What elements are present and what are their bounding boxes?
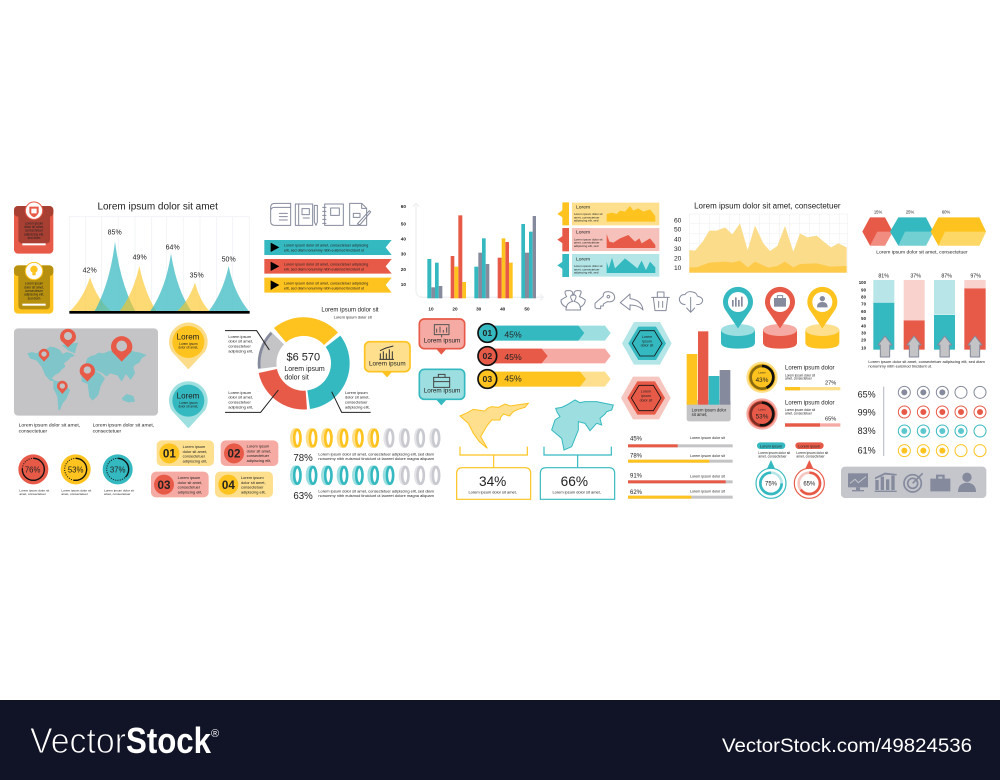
footer bar: Vector	[30, 720, 126, 761]
card: step 02: consectetuer	[247, 453, 270, 458]
marker: yellow teardrop: Lorem	[177, 333, 200, 342]
donut chart: Lorem ipsum	[284, 366, 325, 373]
chart: dot ratings: 61%	[858, 445, 876, 455]
card: step 04: consectetuer	[241, 485, 264, 490]
gauge: red 65 percent pointer	[794, 442, 828, 498]
bar chart: grouped columns	[401, 203, 543, 311]
bar chart: grouped columns: 30	[401, 252, 406, 257]
banner: teal ribbon: elit, sed diam nonummy nibh euismod tincidunt ut	[284, 248, 364, 252]
gauge: 53 percent: 53%	[68, 465, 84, 474]
banner: red ribbon: Lorem ipsum dolor sit amet, consectetuer adipiscing	[284, 262, 368, 266]
panel: yellow note card: Lorem ipsum	[25, 282, 43, 286]
area chart	[674, 214, 848, 273]
stacked bar chart with arrows: 81%	[878, 273, 889, 279]
marker: yellow teardrop	[169, 323, 208, 369]
progress bar: 01 teal	[478, 324, 611, 342]
chart: hexagonal prism proportions	[862, 209, 986, 246]
icon: reply arrow	[620, 294, 643, 310]
text block: donut note bottom right: Lorem ipsum	[345, 390, 368, 395]
hexagon: red	[621, 377, 671, 419]
gauge: 53 percent with bar	[746, 398, 840, 430]
progress bar: 78 percent: Lorem ipsum dolor sit	[690, 454, 725, 458]
text block: donut note bottom left	[228, 390, 253, 409]
stacked bar chart with arrows: 20	[861, 338, 867, 343]
panel: yellow mini area strip	[557, 202, 659, 225]
gauge: teal 75 percent pointer	[756, 442, 790, 498]
stacked bar chart with arrows: 10	[861, 345, 867, 350]
stacked bar chart with arrows: 90	[861, 287, 867, 292]
card: step 01: consectetuer	[183, 454, 206, 459]
footer bar: ®	[211, 728, 219, 740]
text block: 63 percent: 63%	[293, 491, 313, 502]
gauge: 53 percent with bar: Lorem ipsum dolor	[785, 400, 835, 406]
card: step 01: Lorem ipsum	[183, 444, 206, 449]
stacked bar chart with arrows: 50	[861, 316, 867, 321]
panel: red mini area strip: Lorem ipsum dolor sit	[574, 237, 603, 241]
hexagon: red: ipsum	[641, 394, 651, 398]
gauge: 53 percent with bar: Lorem ipsum dolor sit	[785, 408, 815, 412]
callout: 66 percent: 66%	[561, 474, 588, 489]
progress bar: 91 percent	[628, 473, 733, 483]
bar chart: grouped columns: 50	[401, 222, 406, 227]
bar chart: grouped columns: 10	[401, 282, 406, 287]
gauge: teal 75 percent pointer: Lorem ipsum	[760, 444, 782, 448]
card: step 01: 01	[163, 448, 176, 461]
bar chart: grouped columns: 10	[428, 306, 434, 311]
text block: donut note top left: adipiscing elit,	[228, 348, 253, 353]
marker: teal teardrop: Lorem ipsum	[179, 401, 198, 405]
progress bar: 02 red	[478, 347, 611, 365]
footer bar	[0, 700, 1000, 780]
area chart: 20	[674, 256, 682, 263]
progress bar: 62 percent: Lorem ipsum dolor sit	[690, 490, 725, 494]
panel: yellow note card	[14, 262, 53, 314]
panel: yellow note card: adipiscing elit,	[24, 293, 44, 297]
text block: donut note bottom left: dolor sit amet,	[228, 395, 253, 400]
area chart: 50	[674, 227, 682, 234]
progress bar: 62 percent: 62%	[630, 490, 643, 496]
gauge: 37 percent	[103, 454, 134, 496]
title: peak chart: Lorem ipsum dolor sit amet	[97, 202, 218, 213]
text block: donut note bottom left: consectetuer	[228, 399, 251, 404]
progress bar: 45 percent	[628, 436, 733, 447]
text block: prism caption: Lorem ipsum dolor sit amet, consectetuer	[876, 250, 968, 256]
gauge: 76 percent: Lorem ipsum dolor sit	[19, 488, 49, 492]
gauge: 43 percent with bar: amet, consectetuer	[785, 377, 812, 381]
text block: 78 percent: 78%	[293, 453, 313, 464]
progress bar: 02 red: 02	[483, 351, 492, 361]
card: step 03: adipiscing elit,	[178, 490, 202, 495]
gauge: 76 percent: 76%	[25, 465, 41, 474]
text block: map caption left: Lorem ipsum dolor sit amet,	[19, 422, 80, 428]
marker: yellow teardrop: Lorem ipsum	[179, 342, 198, 346]
card: step 04: 04	[222, 479, 235, 492]
text block: donut note bottom right: consectetuer	[345, 399, 368, 404]
chart: hexagonal prism proportions: 60%	[942, 209, 950, 214]
progress bar: 78 percent	[628, 453, 733, 463]
text block: donut note top left	[228, 334, 253, 353]
gauge: red 65 percent pointer: Lorem ipsum	[798, 444, 820, 448]
callout: yellow chart bubble: Lorem ipsum	[369, 361, 406, 368]
text block: 78 percent: nonummy nibh euismod tincidunt ut laoreet dolore magna aliquam	[318, 456, 435, 461]
bar chart: grouped columns: 20	[452, 306, 458, 311]
text block: 63 percent: Lorem ipsum dolor sit amet, consectetuer adipiscing elit, sed diam	[318, 488, 435, 493]
progress bar: 91 percent: 91%	[630, 473, 643, 479]
marker: teal teardrop: dolor sit amet,	[178, 404, 198, 408]
panel: red mini area strip: amet, consectetuer	[574, 241, 599, 245]
panel: yellow note card: sed diam	[28, 296, 41, 300]
chart: peak chart: 35%	[190, 272, 204, 279]
card: step 02: 02	[228, 448, 241, 461]
banner: yellow ribbon: Lorem ipsum dolor sit amet, consectetuer adipiscing	[284, 281, 368, 285]
panel: teal mini area strip: amet, consectetuer	[574, 267, 599, 271]
gauge: 37 percent: 37%	[110, 465, 126, 474]
chart: hexagonal prism proportions: 25%	[906, 209, 914, 214]
panel: red note card: dolor sit amet,	[24, 225, 44, 229]
gauge: 53 percent with bar: Lorem	[758, 407, 767, 411]
progress bar: 45 percent: Lorem ipsum dolor sit	[690, 436, 725, 440]
gauge: 53 percent with bar: amet, consectetuer	[785, 411, 812, 415]
bar chart: grouped columns: 40	[500, 306, 506, 311]
text block: map caption left	[19, 422, 80, 434]
panel: teal mini area strip: Lorem	[576, 256, 590, 262]
chart: peak chart	[69, 217, 250, 314]
panel: yellow mini area strip: amet, consectetuer	[574, 215, 599, 219]
icon: people	[561, 291, 585, 310]
card: step 02	[221, 440, 278, 466]
chart: teal ring row 63 percent	[291, 467, 439, 484]
chart: dot ratings: 65%	[858, 389, 876, 399]
donut chart: dolor sit	[284, 375, 309, 382]
gauge: red 65 percent pointer: amet, consectetuer	[796, 455, 826, 459]
gauge: red 65 percent pointer: Lorem ipsum dolor sit	[796, 451, 828, 455]
text block: map caption right: Lorem ipsum dolor sit amet,	[93, 422, 154, 428]
gauge: 53 percent: amet, consectetuer	[61, 492, 88, 496]
donut chart	[225, 317, 371, 412]
panel: teal mini area strip: adipiscing elit, sed	[574, 271, 599, 275]
area chart: 10	[674, 265, 682, 272]
bar chart: grouped columns: 40	[401, 236, 406, 241]
map: North America	[460, 403, 528, 448]
hexagon: red: Lorem	[641, 390, 651, 394]
progress bar: 78 percent: 78%	[630, 453, 643, 459]
marker: yellow pin on cylinder	[805, 287, 839, 349]
chart: peak chart: 42%	[83, 268, 97, 275]
card: step 04	[215, 472, 273, 497]
gauge: teal 75 percent pointer: Lorem ipsum dolor sit	[758, 451, 790, 455]
gauge: 43 percent with bar	[746, 362, 840, 393]
gauge: teal 75 percent pointer: 75%	[765, 481, 778, 487]
text block: stacked bar caption: nonummy nibh euismod tincidunt ut.	[868, 364, 932, 369]
hexagon: teal: dolor sit	[641, 344, 653, 348]
progress bar: 91 percent: Lorem ipsum dolor sit	[690, 475, 725, 479]
gauge: red 65 percent pointer: 65%	[803, 481, 816, 487]
chart: dot ratings: 99%	[858, 407, 876, 417]
marker: yellow teardrop: dolor sit amet,	[178, 345, 198, 349]
chart: peak chart: 50%	[222, 257, 236, 264]
area chart: 30	[674, 246, 682, 253]
callout: 34 percent: Lorem ipsum dolor sit amet,	[468, 489, 517, 494]
panel: teal mini area strip	[557, 254, 659, 277]
panel: red note card: consectetuer	[25, 229, 43, 233]
heading: donut chart	[321, 307, 379, 319]
stacked bar chart with arrows: 37%	[910, 273, 921, 279]
gauge: 43 percent with bar: Lorem ipsum dolor	[785, 366, 835, 372]
banner: yellow ribbon	[264, 278, 392, 293]
callout: teal briefcase bubble	[419, 369, 465, 405]
footer bar: Stock	[126, 720, 212, 761]
gauge: 76 percent	[18, 454, 49, 496]
card: step 03: 03	[158, 479, 171, 492]
gauge: 43 percent with bar: Lorem ipsum dolor sit	[785, 373, 815, 377]
card: step 03: Lorem ipsum	[178, 475, 201, 480]
panel: business icons strip	[841, 467, 986, 498]
stacked bar chart with arrows: 40	[861, 323, 867, 328]
text block: stacked bar caption: Lorem ipsum dolor sit amet, consectetuer adipiscing elit, sed diam	[868, 359, 986, 364]
panel: yellow mini area strip: Lorem ipsum dolor sit	[574, 212, 603, 216]
gauge: 53 percent with bar: 53%	[756, 414, 769, 421]
panel: teal mini area strip: Lorem ipsum dolor sit	[574, 264, 603, 268]
panel: world map with pins	[14, 328, 158, 416]
panel: red note card: adipiscing elit,	[24, 232, 44, 236]
heading: donut chart: Lorem ipsum dolor sit	[334, 314, 373, 319]
panel: yellow note card: consectetuer	[25, 289, 43, 293]
gauge: 43 percent with bar: Lorem	[758, 371, 767, 375]
marker: red pin on cylinder	[763, 287, 797, 349]
chart: dot ratings: 83%	[858, 426, 876, 436]
marker: teal teardrop: Lorem	[177, 392, 200, 401]
card: step 04: Lorem ipsum	[241, 475, 264, 480]
progress bar: 03 yellow: 03	[483, 374, 492, 384]
panel: red mini area strip: Lorem	[576, 230, 590, 236]
footer bar: VectorStock.com/49824536	[722, 736, 972, 757]
icon: trash can	[652, 292, 669, 311]
text block: 78 percent: Lorem ipsum dolor sit amet, consectetuer adipiscing elit, sed diam	[318, 451, 435, 456]
text block: map caption left: consectetuer	[19, 428, 48, 434]
stacked bar chart with arrows: 97%	[970, 273, 981, 279]
gauge: 37 percent: Lorem ipsum dolor sit	[104, 488, 134, 492]
panel: red mini area strip	[557, 228, 659, 251]
text block: 63 percent: nonummy nibh euismod tincidunt ut laoreet dolore magna aliquam	[318, 493, 435, 498]
stacked bar chart with arrows	[859, 273, 986, 357]
panel: yellow mini area strip: Lorem	[576, 205, 590, 211]
panel: red mini area strip: adipiscing elit, sed	[574, 244, 599, 248]
progress bar: 45 percent: 45%	[630, 436, 643, 442]
text block: 63 percent	[293, 488, 435, 502]
text block: donut note bottom right	[345, 390, 370, 409]
marker: teal pin on cylinder	[721, 287, 755, 349]
text block: donut note top left: consectetuer	[228, 344, 251, 349]
stacked bar chart with arrows: 70	[861, 302, 867, 307]
callout: 34 percent: 34%	[479, 474, 506, 489]
panel: yellow note card: dolor sit amet,	[24, 285, 44, 289]
gauge: 37 percent: amet, consectetuer	[104, 492, 131, 496]
stacked bar chart with arrows: 60	[861, 309, 867, 314]
panel: yellow mini area strip: adipiscing elit, sed	[574, 219, 599, 223]
chart: peak chart: 85%	[108, 230, 122, 237]
marker: teal teardrop	[169, 381, 208, 428]
gauge: 53 percent: Lorem ipsum dolor sit	[61, 488, 91, 492]
panel: red note card: sed diam	[28, 236, 41, 240]
stacked bar chart with arrows: 80	[861, 294, 867, 299]
card: step 03	[151, 472, 209, 497]
map: Eurasia and Africa	[552, 400, 613, 450]
text block: map caption right	[93, 422, 154, 434]
chart: hexagonal prism proportions: 15%	[874, 209, 882, 214]
callout: 34 percent	[457, 447, 531, 499]
stacked bar chart with arrows: 87%	[941, 273, 952, 279]
text block: donut note top left: Lorem ipsum	[228, 334, 252, 339]
banner: teal ribbon	[264, 240, 392, 255]
card: step 03: dolor sit amet,	[178, 480, 202, 485]
callout: red presentation bubble: Lorem ipsum	[424, 338, 460, 345]
stacked bar chart with arrows: 100	[859, 280, 867, 285]
bar chart: card with four columns: Lorem ipsum dolor	[692, 407, 727, 412]
hexagon: teal	[622, 322, 672, 365]
text block: stacked bar caption	[868, 359, 986, 369]
banner: teal ribbon: Lorem ipsum dolor sit amet, consectetuer adipiscing	[284, 243, 368, 247]
heading: donut chart: Lorem ipsum dolor sit	[321, 307, 379, 313]
chart: dot ratings	[858, 386, 986, 457]
gauge: 53 percent	[61, 454, 91, 496]
gauge: teal 75 percent pointer: amet, consectetuer	[758, 455, 788, 459]
area chart: 40	[674, 236, 682, 243]
icon row: books and notes	[271, 203, 371, 225]
card: step 01: dolor sit amet,	[183, 449, 207, 454]
progress bar: 62 percent	[628, 490, 733, 499]
bar chart: grouped columns: 60	[401, 204, 406, 209]
gauge: 43 percent with bar: 43%	[756, 377, 769, 384]
text block: donut note bottom left: adipiscing elit,	[228, 404, 253, 409]
chart: peak chart: 49%	[133, 255, 147, 262]
chart: peak chart: 64%	[166, 245, 180, 252]
text block: 78 percent	[293, 451, 435, 464]
title: area chart: Lorem ipsum dolor sit amet, consectetuer	[694, 201, 841, 210]
bar chart: grouped columns: 50	[524, 306, 530, 311]
callout: 66 percent	[540, 447, 615, 499]
donut chart: $6 570	[287, 351, 320, 363]
card: step 04: adipiscing elit,	[241, 490, 266, 495]
chart: yellow ring row 78 percent	[291, 429, 439, 447]
card: step 04: dolor sit amet,	[241, 480, 266, 485]
banner: yellow ribbon: elit, sed diam nonummy nibh euismod tincidunt ut	[284, 286, 364, 290]
text block: donut note top left: dolor sit amet,	[228, 339, 253, 344]
progress bar: 01 teal: 45%	[504, 330, 522, 340]
card: step 02: dolor sit amet,	[247, 448, 271, 453]
icon: key	[595, 292, 615, 309]
stacked bar chart with arrows: 30	[861, 331, 867, 336]
callout: 66 percent: Lorem ipsum dolor sit amet,	[552, 489, 601, 494]
card: step 01	[157, 440, 214, 466]
text block: donut note bottom left: Lorem ipsum	[228, 390, 252, 395]
text block: donut note bottom right: adipiscing elit,	[345, 404, 370, 409]
bar chart: grouped columns: 20	[401, 267, 406, 272]
bar chart: card with four columns: sit amet,	[692, 412, 707, 417]
progress bar: 02 red: 45%	[504, 352, 522, 362]
callout: yellow chart bubble	[365, 342, 410, 377]
progress bar: 03 yellow: 45%	[504, 374, 522, 384]
card: step 03: consectetuer	[178, 485, 201, 490]
bar chart: card with four columns	[687, 331, 731, 421]
callout: teal briefcase bubble: Lorem ipsum	[424, 388, 460, 395]
hexagon: red: dolor sit	[640, 398, 652, 402]
banner: red ribbon: elit, sed diam nonummy nibh euismod tincidunt ut	[284, 267, 364, 271]
card: step 02: adipiscing elit,	[247, 458, 271, 463]
text block: map caption right: consectetuer	[93, 428, 122, 434]
banner: red ribbon	[264, 259, 392, 274]
bar chart: grouped columns: 30	[476, 306, 482, 311]
gauge: 43 percent with bar: 27%	[825, 381, 836, 387]
progress bar: 03 yellow	[478, 370, 611, 388]
hexagon: teal: ipsum	[642, 339, 652, 343]
gauge: 76 percent: amet, consectetuer	[19, 492, 46, 496]
card: step 01: adipiscing elit,	[183, 459, 207, 464]
gauge: 53 percent with bar: 65%	[825, 417, 836, 423]
icon: cloud download	[679, 292, 703, 312]
hexagon: teal: Lorem	[642, 335, 652, 339]
panel: red note card	[14, 202, 53, 254]
callout: red presentation bubble	[419, 319, 465, 355]
card: step 02: Lorem ipsum	[247, 443, 270, 448]
area chart: 60	[674, 217, 682, 224]
progress bar: 01 teal: 01	[483, 328, 492, 338]
text block: donut note bottom right: dolor sit amet,	[345, 395, 370, 400]
panel: red note card: Lorem ipsum	[25, 221, 43, 225]
